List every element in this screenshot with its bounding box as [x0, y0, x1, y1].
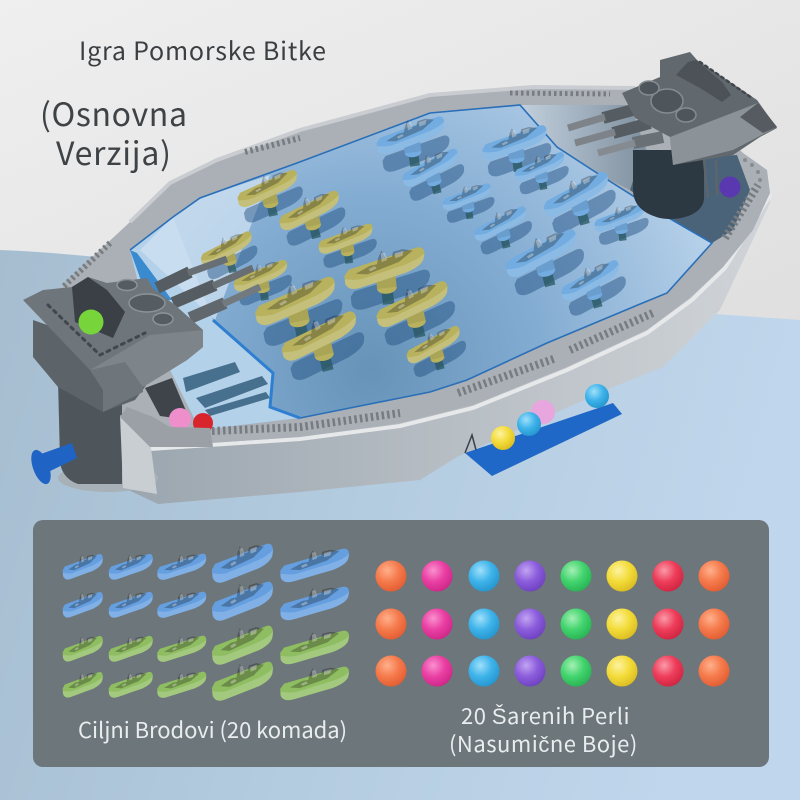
target ships: khaki fleet: [197, 168, 471, 383]
blue corner: [130, 250, 172, 300]
blue tray: [465, 403, 622, 476]
turret rivets: [700, 62, 752, 98]
beads row 1: [376, 560, 730, 592]
pink bead: [169, 408, 191, 430]
turret cylinder: [58, 380, 122, 484]
beads row 3: [376, 656, 730, 686]
rim corner: [120, 407, 213, 447]
water rim edge: [130, 105, 712, 418]
caption: beads: (Nasumične Boje): [449, 727, 638, 759]
blue plunger: [27, 443, 77, 487]
right turret: [568, 52, 777, 219]
board rim: [62, 87, 770, 447]
caption: beads: [449, 699, 638, 759]
game board: [62, 87, 771, 504]
tray lip: [465, 435, 476, 453]
back recess: [520, 105, 650, 195]
rim end piece: [120, 415, 157, 494]
green bead: [78, 310, 104, 334]
turret domes: [639, 81, 696, 122]
turret domes: [117, 280, 173, 325]
rim studs: [133, 158, 762, 438]
turret top plate: [23, 277, 203, 412]
turret base ring: [58, 464, 158, 492]
turret body: [33, 320, 150, 412]
beads row 2: [376, 608, 730, 640]
left turret: [23, 259, 260, 494]
turret legs: [145, 378, 190, 420]
turret hatch: [676, 60, 731, 102]
turret cylinder: [633, 150, 704, 219]
turret supports: [704, 160, 717, 198]
panel ships: green rows: [62, 625, 351, 702]
panel: contents: [33, 520, 769, 767]
purple bead: [720, 176, 740, 198]
barrel shadows: [183, 362, 270, 416]
turret side armor: [670, 103, 777, 165]
subtitle: [40, 90, 187, 175]
water floor: [130, 105, 712, 430]
turret front armor: [90, 330, 203, 387]
turret top plate: [622, 52, 777, 165]
target ships: blue fleet: [374, 115, 651, 318]
caption: target ships: Ciljni Brodovi (20 komada): [78, 713, 347, 745]
panel ships: blue rows: [62, 543, 351, 622]
red bead: [193, 413, 213, 433]
caption: beads: 20 Šarenih Perli: [461, 699, 630, 731]
background: light wall: [0, 0, 800, 330]
title: Igra Pomorske Bitke: [79, 32, 326, 68]
back rim highlight: [130, 87, 635, 222]
well behind right turret: [630, 155, 750, 243]
turret barrels: [157, 259, 260, 318]
blue partition edge: [213, 320, 300, 418]
subtitle: Verzija): [56, 129, 171, 175]
background: blue cloth: [0, 250, 800, 800]
board front wall: [118, 190, 770, 504]
turret rivets: [48, 305, 145, 355]
subtitle: (Osnovna: [40, 90, 187, 136]
rim light edge: [150, 194, 771, 449]
left pale panel: [130, 217, 300, 430]
beads on tray: [531, 400, 555, 424]
turret end block: [740, 103, 777, 133]
turret barrels: [568, 110, 663, 153]
pale corner glow: [140, 175, 270, 320]
turret recess: [72, 277, 125, 338]
front bead tray: [465, 384, 622, 476]
rim hatch strip: [62, 93, 758, 431]
